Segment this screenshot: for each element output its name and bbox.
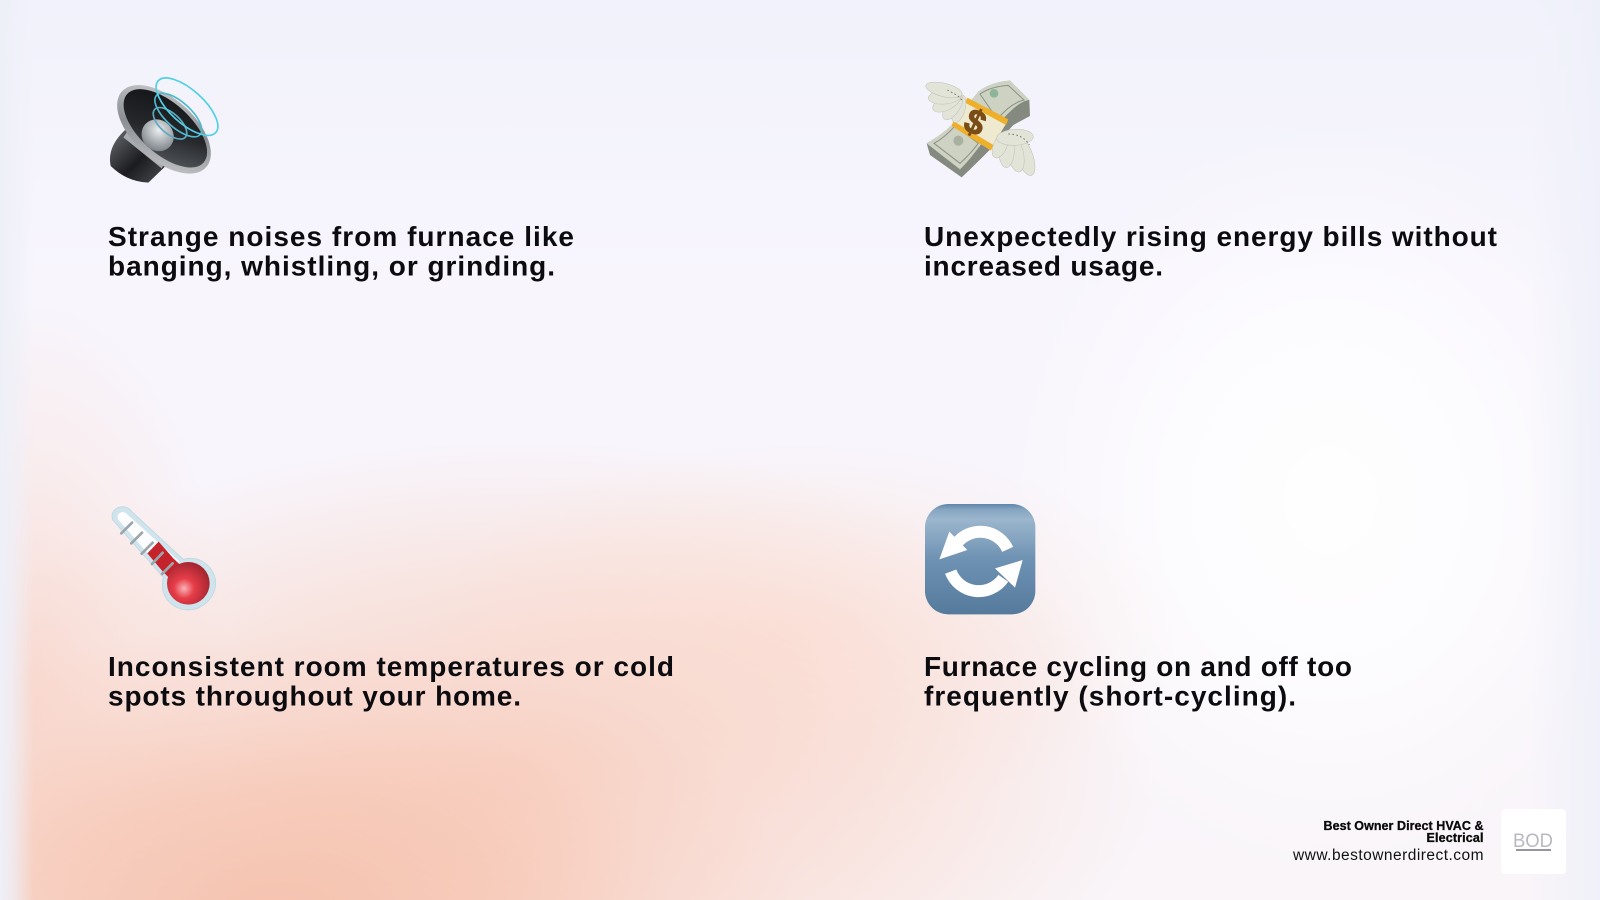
heading: strange noises: banging, whistling, or grinding.: [108, 250, 555, 282]
icon: refresh arrows: [925, 504, 1035, 614]
company name: Electrical: [1426, 831, 1484, 845]
logo badge: BOD: [1513, 831, 1553, 852]
icon: speaker: [101, 68, 227, 190]
footer: company branding: [1292, 809, 1566, 874]
website: www.bestownerdirect.com: [1292, 847, 1484, 864]
heading: short cycling: Furnace cycling on and off too: [924, 651, 1352, 682]
panel: strange noises: [101, 68, 574, 282]
panel: inconsistent temperatures: [108, 507, 674, 712]
panel: rising energy bills: [924, 79, 1497, 282]
heading: inconsistent temperatures: [108, 651, 674, 712]
heading: rising energy bills: [924, 221, 1497, 282]
logo badge: [1501, 809, 1566, 874]
heading: short cycling: [924, 651, 1352, 712]
heading: strange noises: Strange noises from furnace like: [108, 221, 574, 252]
heading: short cycling: frequently (short-cycling).: [924, 680, 1296, 712]
icon: thermometer: [112, 507, 216, 610]
heading: inconsistent temperatures: Inconsistent room temperatures or cold: [108, 651, 674, 682]
company name: Best Owner Direct HVAC &: [1324, 819, 1484, 833]
icon: money with wings: [924, 79, 1040, 178]
heading: inconsistent temperatures: spots throughout your home.: [108, 680, 521, 712]
heading: rising energy bills: increased usage.: [924, 250, 1163, 282]
panel: short cycling: [924, 504, 1352, 712]
company name: [1324, 819, 1484, 845]
heading: strange noises: [108, 221, 574, 282]
heading: rising energy bills: Unexpectedly rising energy bills without: [924, 221, 1497, 252]
icon: money with wings: $: [958, 102, 992, 144]
